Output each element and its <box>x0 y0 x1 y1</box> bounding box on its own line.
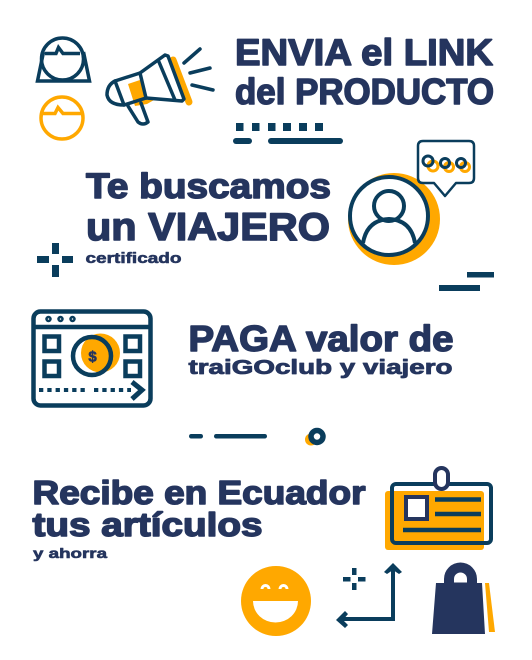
icon: orange avatar <box>41 97 83 139</box>
text: traigoclub y viajero: traiGOclub y viajero <box>188 357 452 379</box>
decorative dashes: top <box>233 123 343 144</box>
arrow: corner two-way <box>336 563 402 628</box>
heading: recibe en ecuador <box>32 474 366 543</box>
heading: recibe en ecuador: Recibe en Ecuador <box>32 474 366 511</box>
heading: paga valor de: PAGA valor de <box>188 318 454 359</box>
heading: envia el link <box>235 32 494 112</box>
icon: payment window <box>33 312 151 406</box>
icon: shopping bag <box>432 563 495 634</box>
icon: dollar sign: $ <box>88 348 97 366</box>
heading: te buscamos un viajero: Te buscamos <box>86 167 331 206</box>
icon: megaphone <box>107 49 213 124</box>
icon: cross large <box>37 243 73 277</box>
heading: te buscamos un viajero: un VIAJERO <box>86 206 330 249</box>
icon: small cross <box>343 568 366 590</box>
text: certificado: certificado <box>86 250 182 267</box>
heading: recibe en ecuador: tus artículos <box>32 506 262 543</box>
decorative bars: right <box>439 272 494 291</box>
text: y ahorra: y ahorra <box>33 545 107 561</box>
decorative divider with ring <box>189 430 323 446</box>
heading: te buscamos un viajero <box>86 167 331 249</box>
icon: id badge <box>385 468 491 550</box>
heading: envia el link: del PRODUCTO <box>235 71 494 112</box>
icon: user profile <box>348 173 440 265</box>
icon: speech bubble <box>418 141 474 196</box>
icon: woman avatar <box>38 38 90 81</box>
heading: envia el link: ENVIA el LINK <box>235 32 493 73</box>
icon: smiley face <box>241 566 311 636</box>
